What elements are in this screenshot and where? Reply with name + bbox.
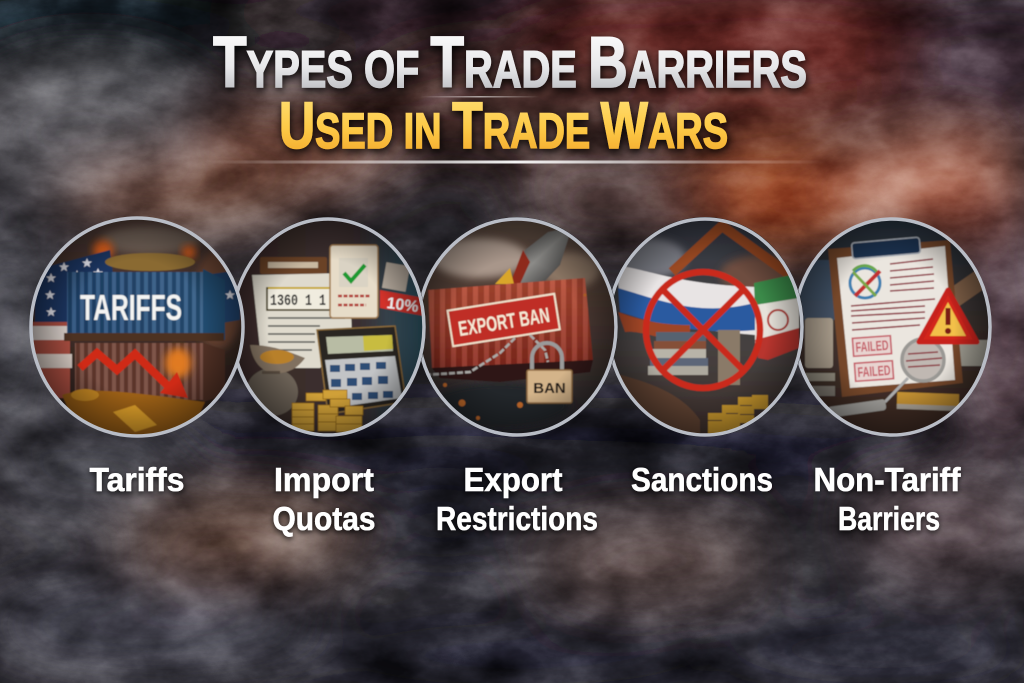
title line 2: Used in Trade Wars: USED IN TRADE WARS <box>279 88 728 162</box>
stamp: failed <box>854 361 894 381</box>
icon: money bag <box>246 345 305 416</box>
stamp: failed: FAILED <box>857 362 891 380</box>
panel: export restrictions <box>410 215 622 440</box>
label: Non-Tariff Barriers: Non-Tariff <box>814 461 961 498</box>
icon: book <box>897 392 959 411</box>
icon: red container <box>428 278 593 382</box>
icon: gold bars <box>292 390 363 432</box>
icon: american flag <box>30 250 240 398</box>
label: Export Restrictions: Restrictions <box>436 500 598 537</box>
icon: missile <box>495 227 572 284</box>
icon: crossed logo <box>850 266 880 298</box>
icon: warning triangle <box>919 290 977 342</box>
label: Import Quotas <box>272 461 376 537</box>
label: Export Restrictions <box>436 461 598 537</box>
label: Import Quotas: Quotas <box>272 500 376 537</box>
label: Non-Tariff Barriers <box>814 461 961 537</box>
icon: gold coins <box>708 395 768 435</box>
panel: non-tariff barriers <box>790 215 995 442</box>
icon: 10% tag: 10% <box>386 295 419 316</box>
icon: blue container: TARIFFS <box>80 287 182 328</box>
icon: note with check mark <box>330 245 378 318</box>
icon: clipboard form <box>252 257 352 368</box>
icon: clipboard form: 1360 1 1 <box>270 292 326 310</box>
panel: tariffs <box>30 215 245 440</box>
label: Sanctions: Sanctions <box>631 461 773 498</box>
label: Non-Tariff Barriers: Barriers <box>838 500 940 537</box>
stamp: failed: FAILED <box>855 337 889 355</box>
icon: blue container <box>64 269 225 341</box>
icon: padlock <box>527 343 572 403</box>
title <box>213 23 807 162</box>
label: Tariffs: Tariffs <box>90 461 184 498</box>
title dividers <box>205 96 825 164</box>
label: Import Quotas: Import <box>274 461 374 498</box>
icon: export ban banner <box>448 294 560 346</box>
label: Export Restrictions: Export <box>464 461 563 498</box>
icon: debris pile <box>105 253 195 271</box>
icon: flame <box>165 348 191 378</box>
icon: flag right <box>754 273 800 360</box>
icon: chain <box>425 335 548 375</box>
title line 1: Types of Trade Barriers: TYPES OF TRADE BARRIERS <box>213 23 807 103</box>
icon: flag left <box>618 266 756 337</box>
rocks <box>620 374 700 433</box>
icon: calculator <box>317 326 406 414</box>
icon: 10% tag <box>380 262 424 316</box>
icon: falling red arrow <box>80 353 188 398</box>
icon: export ban banner: EXPORT BAN <box>457 304 551 341</box>
icon: fire glows <box>93 240 196 260</box>
icon: prohibition sign <box>646 272 760 388</box>
document lines <box>851 259 935 330</box>
icon: books and papers behind <box>795 270 990 396</box>
panel: import quotas <box>228 215 428 440</box>
icon: padlock: BAN <box>533 380 566 397</box>
stamp: failed <box>852 336 892 356</box>
icon: clipboard <box>828 237 963 397</box>
icon: gold pile <box>62 389 205 435</box>
panel: sanctions <box>612 217 804 437</box>
icon: stack of goods <box>648 330 740 385</box>
icon: rust container <box>75 343 225 402</box>
icon: magnifier <box>828 339 944 418</box>
